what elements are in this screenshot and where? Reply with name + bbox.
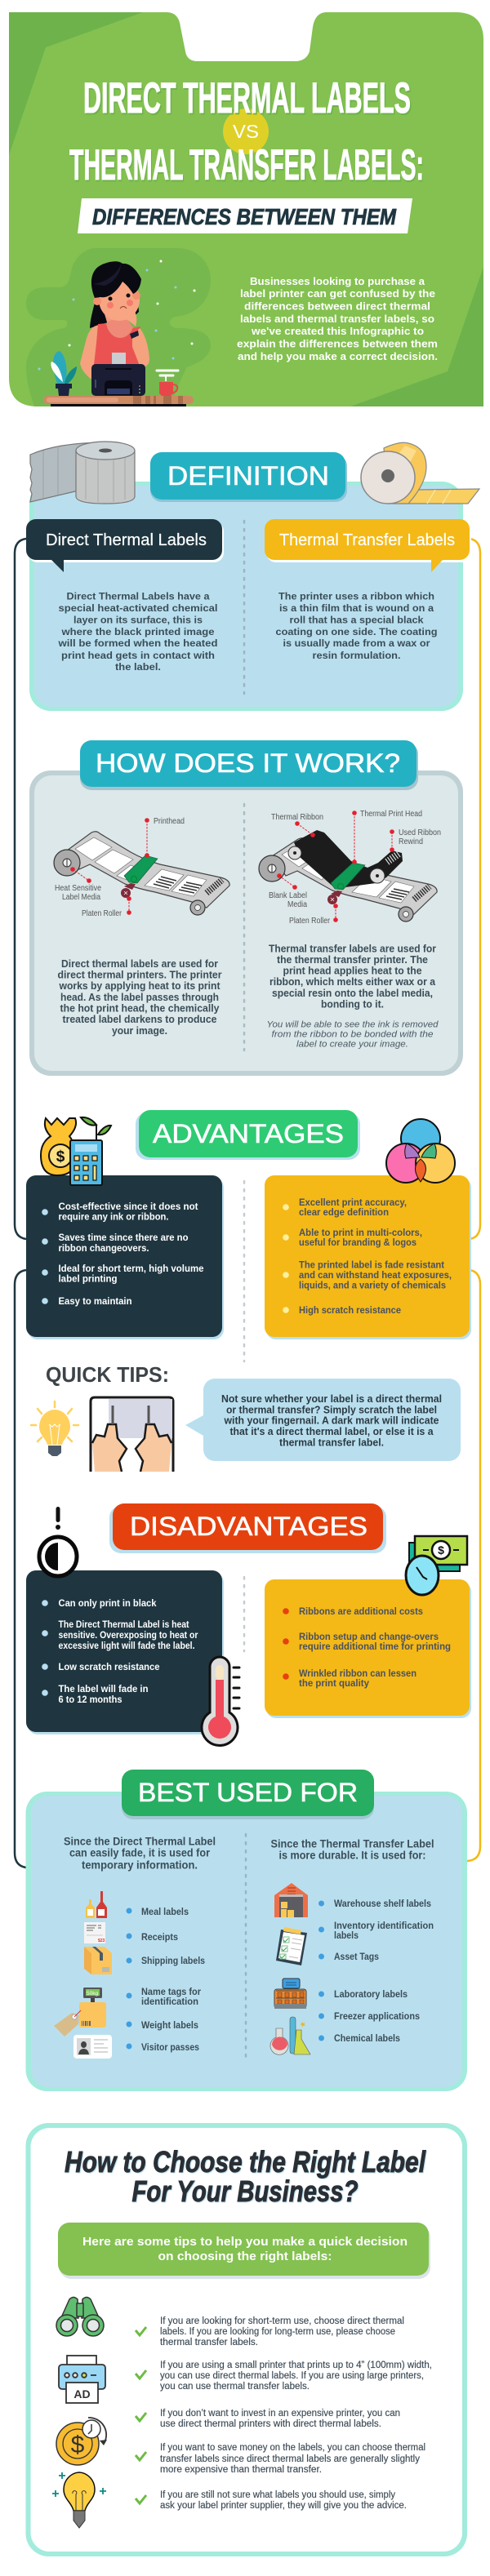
text: direct thermal process: Direct thermal labels are used for: [61, 957, 218, 970]
icon: colour circles: [386, 1119, 455, 1183]
heading: how to choose: [65, 2145, 427, 2209]
tab: thermal transfer labels: [265, 519, 471, 572]
panel: transfer disadvantages: [265, 1579, 471, 1718]
tip list: If you are looking for short-term use, choose direct thermal: [160, 2316, 404, 2326]
text: thermal transfer process: special resin onto the label media,: [272, 987, 433, 999]
panel: direct advantages: ribbon changeovers.: [59, 1242, 149, 1254]
panel: transfer advantages: Able to print in multi-colors,: [299, 1227, 422, 1238]
list: thermal transfer uses: Inventory identification: [334, 1921, 434, 1931]
VS badge: [223, 109, 269, 154]
tip list: transfer labels since direct thermal labels are generally slightly: [160, 2454, 420, 2464]
section: advantages: [26, 1110, 471, 1361]
list: thermal transfer uses: labels: [334, 1931, 359, 1941]
tip list: labels. If you are looking for long-term use, please choose: [160, 2327, 395, 2337]
illustration: woman at printer: [26, 248, 211, 406]
list: thermal transfer uses: Warehouse shelf labels: [334, 1899, 431, 1909]
tab: thermal transfer labels: Thermal Transfer Labels: [279, 531, 455, 549]
text: direct thermal process: head. As the label passes through: [60, 991, 219, 1003]
note: ink removal: [266, 1020, 439, 1050]
list: thermal transfer uses: Freezer applications: [334, 2012, 420, 2022]
tip list: ask your label printer supplier, they will give you the advice.: [160, 2501, 407, 2511]
heading: how does it work: [80, 740, 418, 790]
icon: sauce bottles: [86, 1891, 107, 1918]
diagram: thermal transfer printer: Rewind: [399, 837, 423, 846]
text: direct thermal process: the hot print head, the chemically: [60, 1002, 220, 1014]
heading: how to choose: For Your Business?: [132, 2175, 359, 2209]
note: ink removal: You will be able to see the ink is removed: [266, 1020, 439, 1030]
icon: money bag and calculator: $: [56, 1148, 65, 1166]
panel: direct disadvantages: The label will fade in: [59, 1683, 149, 1694]
icon: money and clock: [406, 1536, 467, 1595]
text: thermal transfer process: [269, 942, 436, 1010]
panel: transfer advantages: The printed label is fade resistant: [299, 1259, 444, 1270]
tip list: thermal transfer labels.: [160, 2338, 258, 2347]
text: direct definition: print head gets in contact with: [61, 650, 215, 661]
panel: transfer advantages: useful for branding & logos: [299, 1237, 416, 1248]
tip list: you can use direct thermal labels. If you are using large printers,: [160, 2371, 424, 2381]
heading: quick tips: QUICK TIPS:: [46, 1362, 169, 1387]
panel: direct disadvantages: excessive light will fade the label.: [59, 1640, 194, 1651]
text: direct definition: where the black printed image: [60, 626, 215, 637]
diagram: thermal transfer printer: Platen Roller: [289, 917, 331, 926]
tip list: more expensive than thermal transfer.: [160, 2465, 322, 2475]
tip list: use direct thermal printers with direct thermal labels.: [160, 2419, 381, 2429]
icon: weight scale and tag: 50kg: [87, 1991, 98, 1996]
section: disadvantages: [26, 1503, 471, 1745]
heading: how to choose: For Your Business?: [132, 2174, 358, 2208]
text: thermal transfer intro: is more durable. It is used for:: [279, 1850, 426, 1861]
heading: how does it work: HOW DOES IT WORK?: [96, 748, 400, 778]
text: transfer definition: [276, 591, 438, 661]
icon: coin and clock: [56, 2418, 107, 2465]
text: thermal transfer intro: Since the Thermal Transfer Label: [271, 1838, 434, 1850]
heading: advantages: [136, 1110, 360, 1160]
icon: coin and clock: $: [71, 2432, 85, 2458]
icon: receipt: $23: [98, 1939, 105, 1943]
tab: direct thermal labels: Direct Thermal Labels: [46, 531, 207, 549]
callout: scratch test: that it's a direct thermal label, or else it is a: [230, 1425, 434, 1437]
panel: transfer disadvantages: Ribbons are additional costs: [299, 1606, 423, 1617]
panel: direct advantages: label printing: [59, 1273, 118, 1285]
panel: transfer disadvantages: the print quality: [299, 1677, 369, 1689]
header panel: [9, 12, 483, 406]
panel: direct advantages: Easy to maintain: [59, 1295, 132, 1307]
tip list: you can use thermal transfer labels.: [160, 2382, 310, 2392]
panel: direct advantages: Saves time since there are no: [59, 1232, 188, 1243]
intro text: label printer can get confused by the: [240, 287, 435, 300]
heading: how to choose: How to Choose the Right Label: [65, 2145, 426, 2178]
icon: printer: AD: [74, 2387, 91, 2401]
heading: definition: [150, 452, 347, 502]
intro text: Businesses looking to purchase a: [250, 275, 425, 287]
note: ink removal: from the ribbon to be bonded with the: [271, 1030, 433, 1040]
diagram: thermal transfer printer: Media: [287, 900, 307, 909]
heading: best used for: BEST USED FOR: [138, 1778, 358, 1807]
right connector line: [467, 539, 480, 1861]
text: direct definition: layer on its surface, this is: [74, 614, 203, 625]
panel: direct disadvantages: 6 to 12 months: [59, 1694, 122, 1705]
callout: scratch test: Not sure whether your label is a direct thermal: [221, 1392, 442, 1405]
diagram: direct thermal printer: [54, 817, 229, 918]
text: transfer definition: The printer uses a ribbon which: [278, 591, 434, 602]
list: direct thermal uses: identification: [141, 1997, 198, 2007]
panel: best used for: [26, 1770, 467, 2091]
panel: direct disadvantages: The Direct Thermal Label is heat: [59, 1619, 189, 1630]
panel: transfer advantages: and can withstand heat exposures,: [299, 1269, 452, 1281]
main title: [69, 74, 425, 191]
text: transfer definition: is usually made from a wax or: [283, 637, 430, 649]
section: quick tips: [31, 1362, 461, 1472]
intro text: [237, 275, 438, 362]
icon: weight scale and tag: [54, 1988, 106, 2036]
panel: direct disadvantages: [26, 1570, 224, 1734]
heading: best used for: [122, 1770, 374, 1819]
text: direct thermal process: [57, 957, 222, 1037]
icon: yellow label roll: [361, 442, 479, 504]
text: direct thermal process: treated label darkens to produce: [62, 1013, 217, 1025]
subtitle banner: DIFFERENCES BETWEEN THEM: [92, 204, 397, 229]
banner: tips intro: Here are some tips to help you make a quick decision: [82, 2236, 408, 2249]
diagram: direct thermal printer: Printhead: [154, 817, 185, 826]
text: transfer definition: roll that has a special black: [289, 614, 424, 625]
text: direct thermal process: your image.: [112, 1024, 167, 1037]
icon: receipt: [84, 1922, 105, 1943]
text: direct thermal intro: temporary information.: [82, 1859, 198, 1871]
diagram: thermal transfer printer: Blank Label: [269, 891, 307, 900]
icon: visitor pass: [74, 2035, 112, 2059]
text: direct definition: [57, 591, 217, 673]
text: direct thermal process: direct thermal printers. The printer: [57, 968, 222, 981]
list: direct thermal uses: Weight labels: [141, 2021, 198, 2031]
diagram: thermal transfer printer: Used Ribbon: [399, 828, 441, 837]
VS badge: VS: [233, 121, 259, 142]
list: thermal transfer uses: Chemical labels: [334, 2034, 400, 2044]
subtitle banner: [78, 198, 412, 233]
panel: definition: [26, 442, 479, 711]
text: direct thermal intro: Since the Direct Thermal Label: [64, 1835, 216, 1848]
banner: tips intro: [58, 2223, 430, 2279]
text: direct thermal process: works by applying heat to its print: [59, 979, 220, 992]
callout: scratch test: thermal transfer label.: [279, 1437, 384, 1448]
panel: transfer disadvantages: Wrinkled ribbon can lessen: [299, 1668, 416, 1679]
panel: transfer disadvantages: require additional time for printing: [299, 1641, 451, 1652]
diagram: direct thermal printer: Heat Sensitive: [55, 884, 101, 893]
tip list: If you are using a small printer that prints up to 4” (100mm) width,: [160, 2361, 432, 2370]
text: thermal transfer process: bonding to it.: [321, 997, 384, 1010]
heading: definition: DEFINITION: [167, 461, 329, 491]
tab: direct thermal labels: [26, 519, 224, 572]
banner: tips intro: on choosing the right labels:: [158, 2250, 332, 2263]
text: direct definition: special heat-activated chemical: [59, 602, 217, 614]
intro text: and help you make a correct decision.: [238, 350, 438, 362]
tip list: If you don’t want to invest in an expensive printer, you can: [160, 2409, 400, 2418]
callout: scratch test: or thermal transfer? Simply scratch the label: [226, 1404, 437, 1415]
icon: light bulb: [31, 1401, 78, 1456]
text: direct definition: will be formed when the heated: [57, 637, 217, 649]
text: direct thermal intro: [64, 1835, 216, 1871]
icon: storage shelf: [274, 1979, 306, 2009]
callout: scratch test: [185, 1379, 461, 1461]
icon: warehouse: [274, 1883, 308, 1917]
list: direct thermal uses: Meal labels: [141, 1908, 189, 1917]
text: direct definition: the label.: [115, 661, 161, 673]
panel: direct advantages: Cost-effective since it does not: [59, 1201, 198, 1212]
list: direct thermal uses: Name tags for: [141, 1988, 201, 1997]
panel: transfer advantages: [265, 1175, 471, 1339]
icon: idea bulb: [52, 2472, 106, 2528]
text: transfer definition: coating on one side. The coating: [276, 626, 438, 637]
list: direct thermal uses: [126, 1908, 205, 2053]
list: thermal transfer uses: Asset Tags: [334, 1952, 379, 1962]
list: direct thermal uses: Receipts: [141, 1933, 178, 1943]
panel: direct advantages: Ideal for short term, high volume: [59, 1263, 204, 1274]
intro text: labels and thermal transfer labels, so: [240, 313, 434, 325]
list: thermal transfer uses: Laboratory labels: [334, 1990, 408, 2000]
diagram: direct thermal printer: Label Media: [62, 893, 100, 902]
diagram: thermal transfer printer: Thermal Ribbon: [271, 813, 323, 822]
heading: disadvantages: [109, 1503, 386, 1553]
text: thermal transfer intro: [271, 1838, 434, 1861]
panel: direct disadvantages: sensitive. Overexposing to heat or: [59, 1629, 198, 1641]
text: thermal transfer process: the thermal transfer printer. The: [277, 953, 428, 966]
icon: money and clock: $: [438, 1543, 444, 1557]
heading: disadvantages: DISADVANTAGES: [130, 1512, 368, 1541]
callout: scratch test: with your fingernail. A dark mark will indicate: [224, 1414, 439, 1427]
icon: contrast warning: [39, 1507, 77, 1576]
text: thermal transfer process: Thermal transfer labels are used for: [269, 942, 436, 955]
list: direct thermal uses: Shipping labels: [141, 1956, 205, 1966]
panel: how to choose: [26, 2123, 467, 2556]
panel: direct disadvantages: Can only print in black: [59, 1597, 157, 1609]
tip list: [160, 2316, 432, 2511]
heading: how to choose: How to Choose the Right Label: [65, 2146, 427, 2179]
intro text: explain the differences between them: [237, 338, 438, 349]
text: direct definition: Direct Thermal Labels have a: [67, 591, 210, 602]
panel: direct advantages: [26, 1175, 224, 1339]
icon: binoculars: [56, 2297, 104, 2336]
checkmarks: [136, 2327, 146, 2503]
panel: direct advantages: require any ink or ribbon.: [59, 1211, 168, 1223]
panel: transfer advantages: clear edge definition: [299, 1206, 389, 1218]
panel: how does it work: [29, 740, 463, 1076]
diagram: direct thermal printer: Platen Roller: [82, 909, 122, 918]
tip list: If you are still not sure what labels you should use, simply: [160, 2490, 395, 2500]
icon: shipping box: [84, 1947, 112, 1974]
panel: transfer disadvantages: Ribbon setup and change-overs: [299, 1631, 439, 1642]
note: ink removal: label to create your image.: [296, 1040, 408, 1050]
icon: clipboard: [276, 1927, 307, 1965]
text: transfer definition: is a thin film that is wound on a: [279, 602, 434, 614]
intro text: differences between direct thermal: [244, 300, 430, 312]
text: thermal transfer process: print head applies heat to the: [283, 965, 421, 976]
list: thermal transfer uses: [318, 1899, 434, 2044]
icon: grey label roll: [30, 442, 135, 504]
text: thermal transfer process: ribbon, which melts either wax or a: [270, 975, 436, 988]
text: direct thermal intro: can easily fade, it is used for: [69, 1846, 211, 1859]
panel: transfer advantages: Excellent print accuracy,: [299, 1197, 407, 1208]
icon: chemistry flasks: [270, 2017, 310, 2054]
left connector line: [15, 539, 26, 1868]
icon: money bag and calculator: [41, 1117, 111, 1185]
panel: transfer advantages: liquids, and a variety of chemicals: [299, 1280, 446, 1291]
diagram: thermal transfer printer: [259, 810, 441, 926]
icon: hands on tablet: [91, 1397, 173, 1472]
icon: thermometer: [202, 1657, 239, 1745]
diagram: thermal transfer printer: Thermal Print Head: [360, 810, 422, 819]
text: transfer definition: resin formulation.: [312, 650, 400, 661]
list: direct thermal uses: Visitor passes: [141, 2043, 199, 2053]
intro text: we've created this Infographic to: [251, 325, 424, 337]
heading: advantages: ADVANTAGES: [153, 1119, 344, 1148]
panel: direct disadvantages: Low scratch resistance: [59, 1661, 160, 1672]
panel: transfer advantages: High scratch resistance: [299, 1304, 401, 1316]
tip list: If you want to save money on the labels, you can choose thermal: [160, 2443, 425, 2453]
icon: printer: [59, 2356, 105, 2403]
